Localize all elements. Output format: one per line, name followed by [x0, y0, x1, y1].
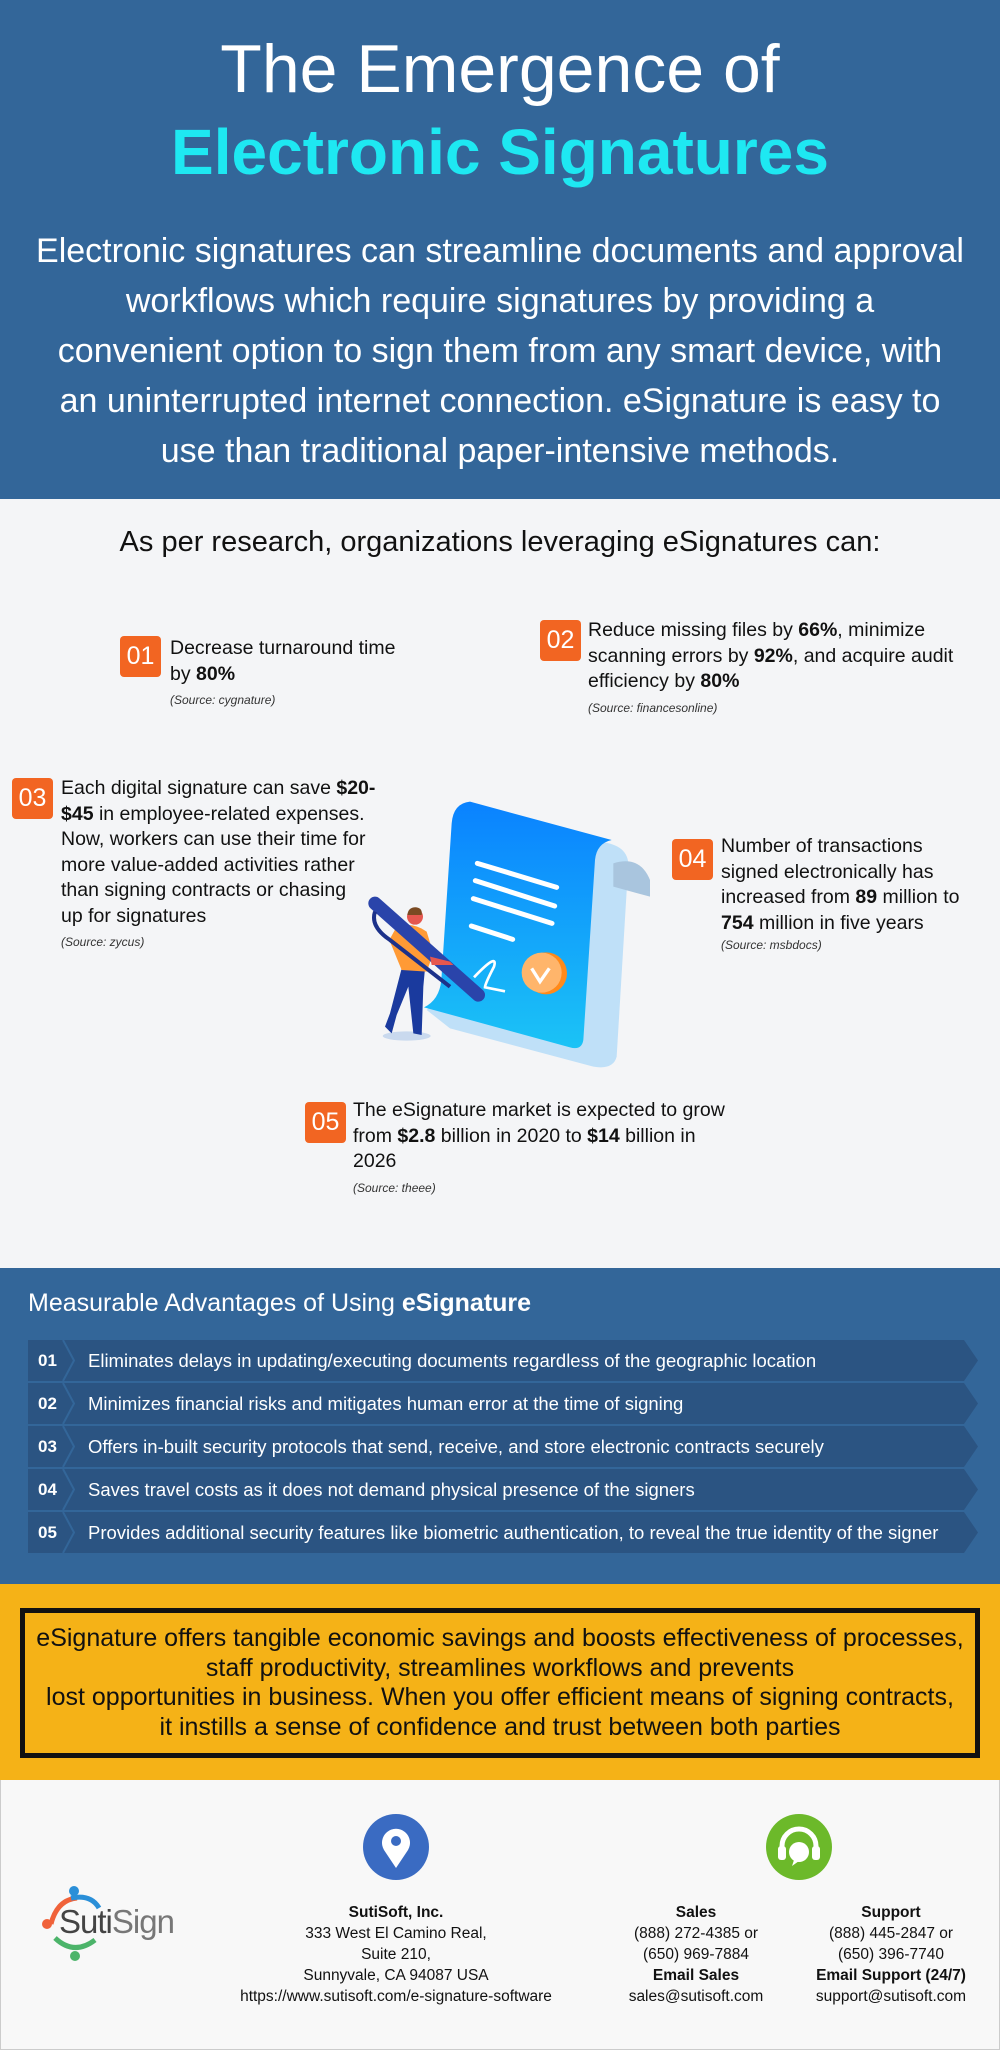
advantage 04: Saves travel costs as it does not demand physical presence of the signers	[88, 1479, 695, 1500]
item 04: Number of transactions	[721, 835, 923, 857]
advantage 03	[28, 1426, 978, 1467]
intro paragraph: use than traditional paper-intensive methods.	[161, 432, 839, 470]
intro paragraph: convenient option to sign them from any smart device, with	[58, 332, 942, 370]
support contact: support@sutisoft.com	[816, 1988, 966, 2005]
advantage 05	[28, 1512, 978, 1553]
item 03: Each digital signature can save $20-	[61, 777, 375, 799]
support contact: (650) 396-7740	[838, 1946, 944, 1963]
advantage 04	[28, 1469, 978, 1510]
item 03	[12, 777, 375, 949]
illustration: signing document	[368, 802, 650, 1068]
item 01	[120, 636, 395, 707]
advantage 02	[28, 1383, 978, 1424]
item 02: (Source: financesonline)	[588, 700, 717, 714]
sales contact: (888) 272-4385 or	[634, 1925, 758, 1942]
item 01: 01	[127, 642, 154, 670]
item 01: by 80%	[170, 662, 235, 684]
support contact: Support	[861, 1904, 921, 1921]
conclusion box: lost opportunities in business. When you offer efficient means of signing contracts,	[46, 1683, 954, 1711]
item 01: Decrease turnaround time	[170, 637, 395, 659]
advantage 01: 01	[38, 1351, 57, 1370]
item 05	[305, 1099, 725, 1194]
support contact	[816, 1904, 966, 2005]
item 03: Now, workers can use their time for	[61, 828, 366, 850]
advantage 02: Minimizes financial risks and mitigates human error at the time of signing	[88, 1393, 683, 1414]
item 04: increased from 89 million to	[721, 886, 959, 908]
sales contact: sales@sutisoft.com	[629, 1988, 763, 2005]
sales contact: (650) 969-7884	[643, 1946, 749, 1963]
sales contact: Sales	[676, 1904, 716, 1921]
item 03: up for signatures	[61, 904, 206, 926]
item 02: scanning errors by 92%, and acquire audit	[588, 644, 953, 666]
address: SutiSoft, Inc.	[349, 1904, 443, 1921]
conclusion box	[20, 1608, 980, 1758]
address: https://www.sutisoft.com/e-signature-software	[240, 1988, 552, 2005]
intro paragraph: workflows which require signatures by providing a	[126, 282, 874, 320]
support contact: Email Support (24/7)	[816, 1967, 966, 1984]
advantage 05: 05	[38, 1523, 57, 1542]
item 04: 754 million in five years	[721, 912, 924, 934]
advantage 02: 02	[38, 1394, 57, 1413]
sales contact	[629, 1904, 763, 2005]
research heading: As per research, organizations leveraging eSignatures can:	[120, 526, 880, 558]
item 05: 05	[312, 1108, 339, 1136]
item 03: $45 in employee-related expenses.	[61, 802, 365, 824]
title: The Emergence of	[220, 31, 780, 107]
logo: SutiSign	[59, 1903, 174, 1940]
intro paragraph	[36, 232, 964, 470]
advantage 03: 03	[38, 1437, 57, 1456]
conclusion panel	[0, 1584, 1000, 1780]
logo	[42, 1886, 174, 1961]
support contact: (888) 445-2847 or	[829, 1925, 953, 1942]
advantages heading: Measurable Advantages of Using eSignature	[28, 1289, 531, 1317]
advantage 03: Offers in-built security protocols that send, receive, and store electronic contracts securely	[88, 1436, 824, 1457]
intro paragraph: Electronic signatures can streamline documents and approval	[36, 232, 964, 270]
item 05: The eSignature market is expected to grow	[353, 1099, 725, 1121]
item 02	[540, 619, 954, 714]
footer	[0, 1780, 1000, 2050]
title: Electronic Signatures	[171, 116, 829, 188]
item 05: 2026	[353, 1150, 396, 1172]
conclusion box: eSignature offers tangible economic savings and boosts effectiveness of processes,	[36, 1624, 964, 1652]
icon: support headset	[766, 1814, 832, 1880]
advantage 01: Eliminates delays in updating/executing documents regardless of the geographic location	[88, 1350, 816, 1371]
advantage 04: 04	[38, 1480, 57, 1499]
item 02: Reduce missing files by 66%, minimize	[588, 619, 925, 641]
address: 333 West El Camino Real,	[305, 1925, 487, 1942]
item 03: 03	[19, 784, 46, 812]
conclusion box: staff productivity, streamlines workflows and prevents	[206, 1654, 794, 1682]
text: (Source: zycus)	[61, 935, 144, 949]
item 05: (Source: theee)	[353, 1180, 436, 1194]
item 04: signed electronically has	[721, 860, 933, 882]
text: (Source: msbdocs)	[721, 938, 822, 952]
address	[240, 1904, 552, 2005]
item 02: 02	[547, 626, 574, 654]
item 04: 04	[679, 845, 706, 873]
item 05: from $2.8 billion in 2020 to $14 billion in	[353, 1124, 696, 1146]
advantage 01	[28, 1340, 978, 1381]
item 02: efficiency by 80%	[588, 670, 739, 692]
sales contact: Email Sales	[653, 1967, 739, 1984]
header panel	[0, 0, 1000, 499]
icon: location	[363, 1814, 429, 1880]
item 04	[672, 835, 959, 952]
address: Suite 210,	[361, 1946, 431, 1963]
title	[171, 31, 829, 188]
item 01: (Source: cygnature)	[170, 693, 275, 707]
item 03: than signing contracts or chasing	[61, 879, 346, 901]
intro paragraph: an uninterrupted internet connection. eSignature is easy to	[60, 382, 940, 420]
address: Sunnyvale, CA 94087 USA	[303, 1967, 489, 1984]
conclusion box: it instills a sense of confidence and trust between both parties	[160, 1712, 840, 1740]
item 03: more value-added activities rather	[61, 854, 355, 876]
advantage 05: Provides additional security features like biometric authentication, to reveal the true identity of the signer	[88, 1522, 938, 1543]
advantages panel	[0, 1268, 1000, 1584]
